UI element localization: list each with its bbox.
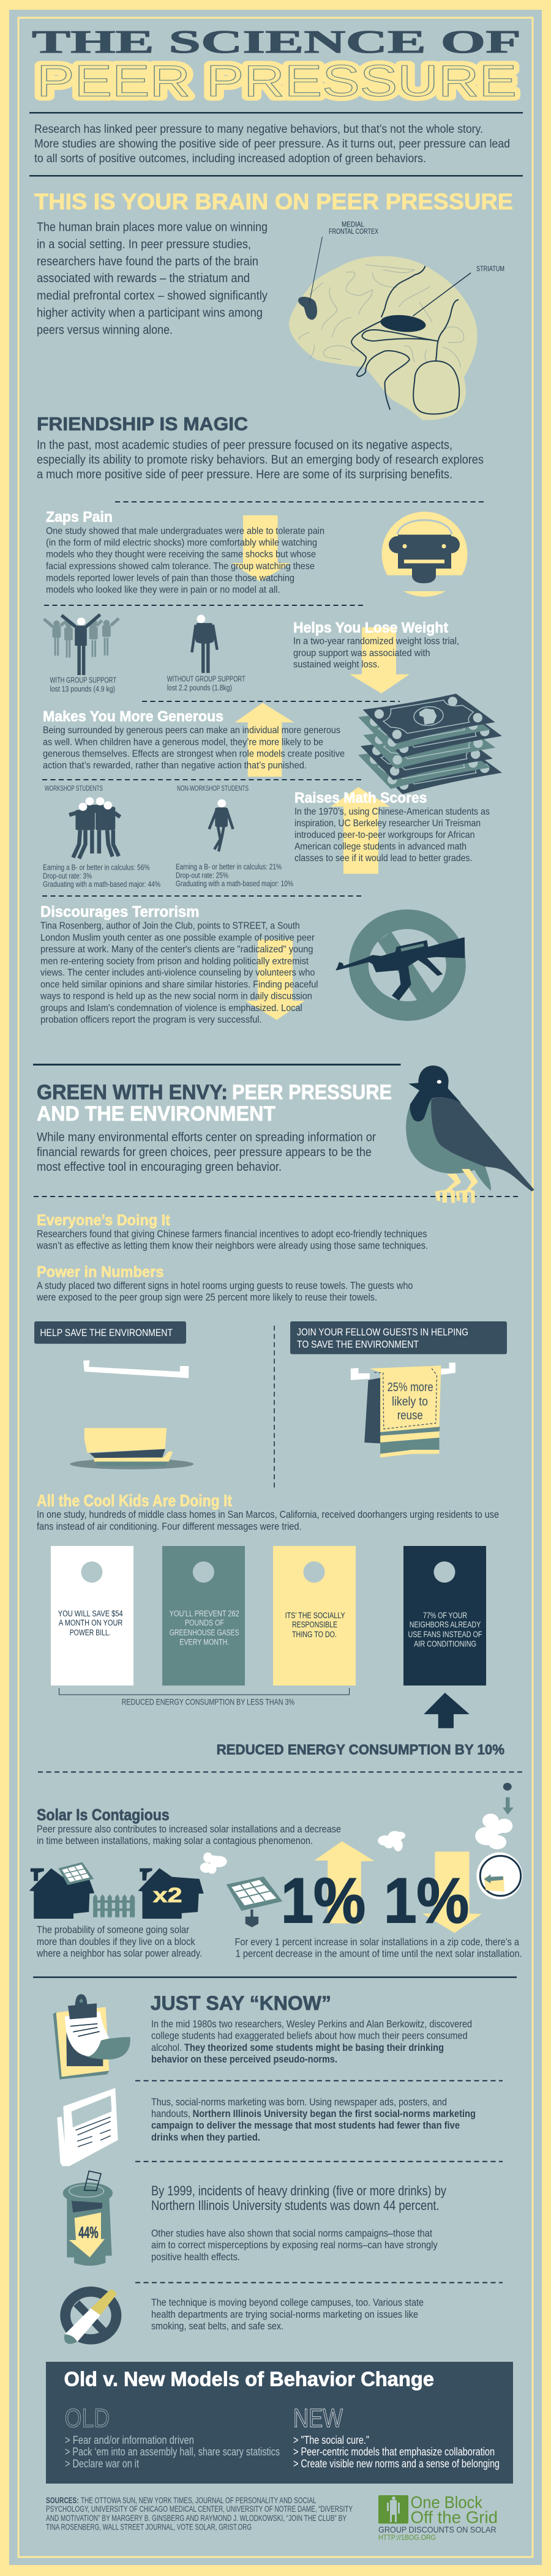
arrow: energy reduced (424, 1693, 470, 1728)
benefit: terrorism: Discourages Terrorism (40, 903, 200, 920)
logo: one block off the grid: Off the Grid (410, 2508, 498, 2527)
sources: PSYCHOLOGY, UNIVERSITY OF CHICAGO MEDICAL CENTER, UNIVERSITY OF NOTRE DAME, “DIVERSITY (46, 2504, 353, 2514)
icon: group support figures (44, 614, 119, 675)
intro text: More studies are showing the positive side of peer pressure. As it turns out, peer pressure can lead (34, 138, 510, 151)
text: beyond campuses: health departments are trying social-norms marketing on issues like (151, 2309, 418, 2320)
text: brain (37, 220, 268, 337)
label: x2: x2 (153, 1884, 182, 1907)
sources: AND MOTIVATION” BY MARGERY B. GINSBERG AND RAYMOND J. WLODKOWSKI, “JOIN THE CLUB” BY (46, 2513, 347, 2523)
icon: recycling can with 44% (63, 2171, 113, 2266)
sources: SOURCES: (46, 2495, 79, 2505)
benefit: math scores (294, 790, 490, 864)
towel label (388, 1381, 433, 1422)
door hanger: greenhouse gases: POUNDS OF (185, 1618, 224, 1627)
icon: falling dot and arrow (503, 1783, 514, 1815)
benefit: generous: action that’s rewarded, rather than negative action that’s punished. (43, 761, 307, 771)
text: just say know 1: They theorized some students might be basing their drinking (184, 2042, 444, 2053)
arrow: time down (422, 1851, 482, 1933)
icon: solar panel on pole (227, 1876, 282, 1927)
label: medial frontal cortex (329, 222, 378, 236)
text: brain: peers versus winning alone. (37, 324, 173, 337)
stats: workshop: Earning a B- or better in calculus: 56% (43, 863, 150, 872)
panel: old v new: > Peer-centric models that emphasize collaboration (293, 2446, 495, 2458)
benefit: terrorism: once held similar opinions and share similar histories. Finding peaceful (40, 979, 318, 990)
text: other studies: positive health effects. (151, 2251, 240, 2263)
intro text: Research has linked peer pressure to many negative behaviors, but that’s not the whole story. (34, 123, 483, 136)
panel: old v new: > Declare war on it (65, 2458, 139, 2470)
benefit: zaps pain: models reported lower levels of pain than those those watching (46, 573, 294, 583)
door hanger: greenhouse gases (162, 1546, 245, 1686)
benefit: lose weight: group support was associated with (293, 648, 430, 659)
section: cool kids: fans instead of air conditioning. Four different messages were tried. (37, 1520, 301, 1532)
benefit: zaps pain: (in the form of mild electric shocks) more comfortably while watching (46, 537, 317, 548)
arrow: terrorism down (246, 939, 305, 1020)
heading: brain: THIS IS YOUR BRAIN ON PEER PRESSURE (34, 189, 513, 214)
sign: join your fellow guests: JOIN YOUR FELLOW GUESTS IN HELPING (297, 1326, 468, 1338)
arrow: zaps pain down (231, 515, 291, 581)
text: heavy drinking (151, 2183, 446, 2213)
section: power in numbers (36, 1263, 413, 1303)
stats: workshop (43, 863, 160, 889)
panel: old v new: > Fear and/or information driven (65, 2434, 194, 2446)
text: just say know 1: alcohol. (151, 2042, 182, 2053)
text: green intro: While many environmental efforts center on spreading information or (37, 1131, 376, 1144)
callout: reduced by 10%: REDUCED ENERGY CONSUMPTION BY 10% (217, 1742, 504, 1758)
benefit: lose weight: Helps You Lose Weight (293, 619, 448, 637)
stats: non-workshop: Drop-out rate: 25% (176, 871, 228, 880)
section: cool kids (37, 1491, 499, 1532)
section: power in numbers: were exposed to the peer group sign were 25 percent more likely to reuse their towels. (36, 1291, 377, 1303)
label: medial frontal cortex: MEDIAL (342, 222, 365, 229)
icon: clouds (200, 1813, 512, 1874)
text: other studies (151, 2228, 438, 2263)
text: heavy drinking: By 1999, incidents of heavy drinking (five or more drinks) by (151, 2183, 446, 2198)
bracket: less than 3%: REDUCED ENERGY CONSUMPTION BY LESS THAN 3% (122, 1697, 294, 1707)
door hanger: neighbors: NEIGHBORS ALREADY (410, 1620, 481, 1629)
icon: lone student figure (209, 799, 233, 851)
benefit: terrorism: London Muslim youth center as one possible example of positive peer (40, 933, 315, 943)
benefit: terrorism: men re-entering society from prison and holding politically extremist (40, 956, 309, 966)
benefit: lose weight: In a two-year randomized weight loss trial, (293, 637, 459, 646)
benefit: generous: as well. When children have a generous model, they’re more likely to be (43, 737, 323, 747)
panel: old v new (46, 2362, 513, 2484)
door hanger: socially responsible: ITS’ THE SOCIALLY (285, 1611, 345, 1620)
benefit: terrorism: Tina Rosenberg, author of Join the Club, points to STREET, a South (40, 921, 300, 931)
text: green intro (37, 1131, 376, 1174)
text: beyond campuses: smoking, seat belts, and safe sex. (151, 2320, 283, 2332)
section: solar is contagious: in time between installations, making solar a contagious phenomenon. (37, 1835, 313, 1846)
door hanger: save money: YOU WILL SAVE $54 (58, 1609, 123, 1618)
icon: solar illustration (29, 1783, 522, 1933)
heading: green with envy: GREEN WITH ENVY: (37, 1081, 228, 1104)
text: installation timing (235, 1936, 522, 1960)
text: brain: The human brain places more value on winning (37, 220, 268, 234)
arrow: generous up (235, 703, 294, 777)
benefit: terrorism: views. The center includes anti-violence counseling by volunteers who (40, 968, 315, 978)
door hanger: neighbors: AIR CONDITIONING (414, 1640, 476, 1649)
icon: fence (93, 1894, 135, 1917)
benefit: terrorism: groups and Islam's condemnation of violence is emphasized. Local (40, 1003, 302, 1014)
text: friendship intro: In the past, most academic studies of peer pressure focused on its negative aspects, (37, 438, 452, 452)
towel label: likely to (392, 1395, 428, 1409)
section: solar is contagious: Peer pressure also contributes to increased solar installations and a decrease (37, 1823, 341, 1835)
text: probability: The probability of someone going solar (37, 1924, 189, 1936)
icon: no smoking (64, 2290, 117, 2344)
benefit: math scores: classes to see if it would lead to better grades. (294, 853, 473, 864)
text: beyond campuses (151, 2297, 424, 2332)
text: probability (36, 1924, 202, 1959)
icon: empty towel rack and towel on floor (70, 1361, 193, 1469)
text: just say know 2: Thus, social-norms marketing was born. Using newspaper ads, posters, and (151, 2096, 447, 2108)
text: just say know 2: handouts, (151, 2108, 190, 2119)
door hanger: socially responsible: RESPONSIBLE (292, 1620, 337, 1629)
benefit: zaps pain: models who looked like they were in pain or no model at all. (46, 584, 280, 595)
heading: just say know: JUST SAY “KNOW” (151, 1992, 331, 2014)
intro text (34, 123, 510, 165)
caption: with group support: lost 13 pounds (4.9 kg) (50, 684, 115, 693)
text: brain: associated with rewards – the striatum and (37, 272, 250, 285)
text: just say know 2: campaign to deliver the message that most students had fewer than five (151, 2119, 460, 2131)
caption: without group support (167, 674, 246, 692)
text: friendship intro: especially its ability to promote risky behaviors. But an emerging body of research explores (37, 453, 484, 466)
caption: with group support (50, 676, 116, 693)
logo: one block off the grid: GROUP DISCOUNTS ON SOLAR (378, 2525, 497, 2534)
text: friendship intro (37, 438, 484, 481)
stats: non-workshop: Graduating with a math-based major: 10% (176, 879, 293, 888)
benefit: zaps pain: models who they thought were receiving the same shocks but whose (46, 550, 316, 560)
text: just say know 1: behavior on these perceived pseudo-norms. (151, 2053, 337, 2065)
icon: recycling can with 44%: 44% (78, 2223, 99, 2242)
benefit: math scores: In the 1970’s, using Chinese-American students as (294, 807, 490, 817)
caption: without group support: WITHOUT GROUP SUPPORT (167, 674, 246, 683)
text: brain: medial prefrontal cortex – showed significantly (37, 289, 268, 302)
benefit: lose weight: sustained weight loss. (293, 660, 380, 670)
benefit: terrorism (40, 903, 318, 1025)
door hanger: socially responsible: THING TO DO. (292, 1630, 337, 1639)
text: other studies: Other studies have also shown that social norms campaigns–those that (151, 2228, 432, 2239)
stats: workshop: Drop-out rate: 3% (43, 872, 92, 881)
intro text: to all sorts of positive outcomes, including increased adoption of green behaviors. (34, 152, 426, 165)
text: brain: higher activity when a participant wins among (37, 306, 263, 319)
heading: green with envy: PEER PRESSURE (232, 1081, 392, 1104)
towel label: 25% more (388, 1381, 433, 1394)
icon: newspaper (57, 2088, 118, 2166)
panel: old v new: > Pack ‘em into an assembly hall, share scary statistics (65, 2446, 280, 2458)
stats: non-workshop (176, 862, 293, 888)
benefit: terrorism: probation officers report the program is very successful. (40, 1015, 262, 1025)
benefit: generous: generous themselves. Effects are strongest when role models create positive (43, 749, 345, 759)
icon: bird (406, 1066, 534, 1203)
text: just say know 1 (151, 2018, 472, 2065)
text: just say know 2 (151, 2096, 476, 2143)
door hanger: save money (51, 1546, 133, 1686)
door hanger: greenhouse gases: YOU’LL PREVENT 262 (170, 1609, 239, 1618)
heading: friendship is magic: FRIENDSHIP IS MAGIC (37, 413, 248, 435)
stats: workshop: Graduating with a math-based major: 44% (43, 879, 160, 889)
title: THE SCIENCE OF (32, 24, 521, 60)
benefit: math scores: Raises Math Scores (294, 790, 427, 807)
benefit: math scores: inspiration, UC Berkeley researcher Uri Treisman (294, 818, 481, 829)
sources: THE OTTOWA SUN, NEW YORK TIMES, JOURNAL OF PERSONALITY AND SOCIAL (81, 2495, 317, 2505)
section: cool kids: All the Cool Kids Are Doing It (37, 1491, 232, 1510)
benefit: math scores: American college students in advanced math (294, 842, 467, 852)
title: PEER PRESSURE (37, 57, 517, 106)
text: probability: more than doubles if they live on a block (37, 1936, 195, 1947)
benefit: lose weight (293, 619, 459, 670)
panel: old v new: > "The social cure." (293, 2434, 369, 2446)
benefit: generous (43, 709, 345, 771)
title (32, 24, 521, 106)
text: green intro: financial rewards for green choices, peer pressure appears to be the (37, 1146, 372, 1159)
sign: help save the environment: HELP SAVE THE ENVIRONMENT (40, 1327, 173, 1338)
text: other studies: aim to correct misperceptions by exposing real norms–can have strongly (151, 2239, 438, 2251)
door hanger: socially responsible (273, 1546, 356, 1686)
panel: old v new: NEW (293, 2404, 343, 2433)
section: everyone's doing it: Researchers found that giving Chinese farmers financial incentives to adopt eco-friendly techniques (37, 1228, 427, 1240)
bracket: less than 3% (59, 1688, 350, 1707)
text: probability: where a neighbor has solar power already. (36, 1947, 202, 1959)
icon: neighbor house x2 (138, 1868, 204, 1919)
towel label: reuse (397, 1409, 423, 1422)
arrow: math scores up (331, 787, 390, 874)
door hanger: save money: POWER BILL. (70, 1628, 111, 1637)
icon: lone figure (192, 614, 217, 673)
caption: without group support: lost 2.2 pounds (1.8kg) (167, 683, 232, 692)
section: everyone's doing it: Everyone’s Doing It (37, 1212, 171, 1229)
icon: workshop huddle figures (69, 797, 120, 859)
door hanger: neighbors (403, 1546, 486, 1686)
text: brain: in a social setting. In peer pressure studies, (37, 238, 251, 252)
caption: non-workshop students: NON-WORKSHOP STUDENTS (177, 784, 249, 793)
stats: non-workshop: Earning a B- or better in calculus: 21% (176, 862, 282, 872)
label: medial frontal cortex: FRONTAL CORTEX (329, 228, 378, 236)
sign: help save the environment (34, 1321, 186, 1344)
logo: one block off the grid (378, 2493, 498, 2542)
benefit: generous: Makes You More Generous (43, 709, 223, 725)
benefit: generous: Being surrounded by generous peers can make an individual more generous (43, 725, 340, 736)
benefit: math scores: introduced peer-to-peer workgroups for African (294, 830, 475, 840)
icon: money stack (358, 693, 502, 794)
heading: green with envy: AND THE ENVIRONMENT (37, 1102, 276, 1126)
caption: with group support: WITH GROUP SUPPORT (50, 676, 116, 685)
sign: join your fellow guests (290, 1321, 507, 1354)
icon: brain (289, 237, 478, 420)
panel: old v new: OLD (65, 2404, 110, 2433)
caption: workshop students: WORKSHOP STUDENTS (45, 784, 103, 793)
text: beyond campuses: The technique is moving beyond college campuses, too. Various state (151, 2297, 424, 2309)
stat: 1 percent decrease: 1% (384, 1865, 469, 1936)
text: heavy drinking: Northern Illinois University students was down 44 percent. (151, 2198, 440, 2213)
icon: clock (476, 1853, 522, 1899)
arrow: solar up (314, 1841, 374, 1924)
door hanger: greenhouse gases: EVERY MONTH. (179, 1638, 229, 1647)
icon: house with solar panel (29, 1862, 94, 1919)
stat: 1 percent increase: 1% (281, 1865, 365, 1936)
icon: clipboard (53, 1994, 130, 2080)
benefit: zaps pain: One study showed that male undergraduates were able to tolerate pain (46, 526, 324, 536)
benefit: zaps pain (46, 509, 324, 595)
text: just say know 2: Northern Illinois University began the first social-norms marketing (193, 2108, 476, 2119)
sign: join your fellow guests: TO SAVE THE ENVIRONMENT (297, 1338, 419, 1350)
icon: towel on rack (351, 1362, 455, 1457)
icon: electric shock head (380, 512, 471, 597)
panel: old v new: Old v. New Models of Behavior Change (64, 2367, 434, 2390)
arrow: lose weight down (350, 627, 410, 693)
benefit: zaps pain: facial expressions showed calm tolerance. The group watching these (46, 561, 315, 572)
sources: TINA ROSENBERG, WALL STREET JOURNAL, VOTE SOLAR, GRIST.ORG (46, 2522, 252, 2531)
title: PEER PRESSURE (37, 57, 517, 106)
section: power in numbers: A study placed two different signs in hotel rooms urging guests to reuse towels. The guests who (37, 1280, 413, 1291)
text: green intro: most effective tool in encouraging green behavior. (37, 1160, 282, 1174)
label: striatum: STRIATUM (476, 266, 504, 273)
section: everyone's doing it: wasn’t as effective as letting them know their neighbors were already using those same techniques. (36, 1240, 428, 1252)
text: just say know 2: drinks when they partied. (151, 2131, 260, 2143)
benefit: terrorism: pressure at work. Many of the center's clients are "radicalized" young (40, 944, 313, 955)
text: just say know 1: college students had exaggerated beliefs about how much their peers consumed (151, 2030, 468, 2042)
door hanger: neighbors: 77% OF YOUR (423, 1611, 467, 1620)
logo: one block off the grid: One Block (410, 2493, 483, 2512)
logo: one block off the grid: HTTP://1BOG.ORG (378, 2533, 436, 2542)
heading: green with envy (37, 1081, 392, 1126)
door hanger: greenhouse gases: GREENHOUSE GASES (170, 1628, 239, 1637)
text: just say know 1: In the mid 1980s two researchers, Wesley Perkins and Alan Berkowitz, discovered (151, 2018, 472, 2029)
door hanger: neighbors: USE FANS INSTEAD OF (408, 1630, 482, 1639)
section: solar is contagious (37, 1805, 341, 1846)
benefit: zaps pain: Zaps Pain (46, 509, 113, 525)
section: power in numbers: Power in Numbers (37, 1263, 164, 1280)
benefit: terrorism: ways to respond is held up as the new social norm in daily discussion (40, 991, 312, 1002)
icon: no guns (335, 919, 465, 1011)
text: friendship intro: a much more positive side of peer pressure. Here are some of its surprising benefits. (37, 468, 452, 481)
sources (46, 2495, 353, 2531)
section: solar is contagious: Solar Is Contagious (37, 1805, 170, 1824)
text: brain: researchers have found the parts of the brain (37, 255, 258, 268)
door hanger: save money: A MONTH ON YOUR (59, 1618, 123, 1627)
section: everyone's doing it (36, 1212, 428, 1252)
panel: old v new: > Create visible new norms and a sense of belonging (293, 2458, 500, 2470)
